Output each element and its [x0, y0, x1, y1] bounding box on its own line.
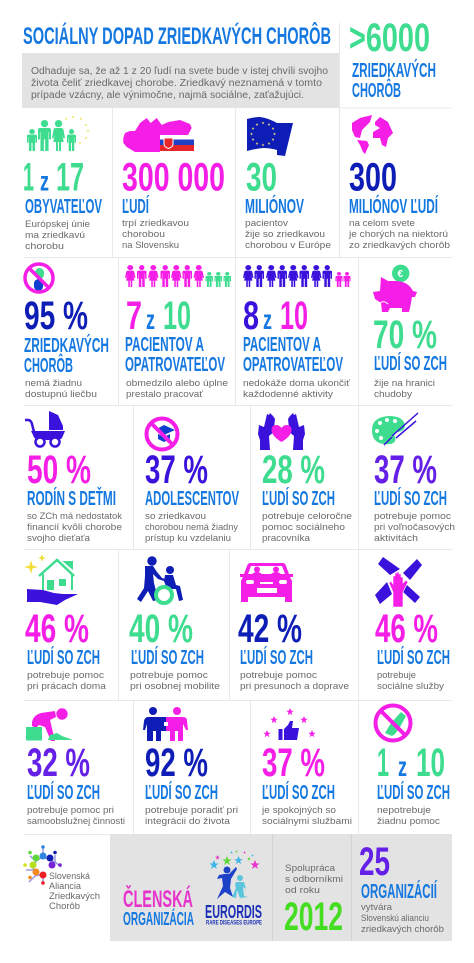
panel: 37 % adolescents: ADOLESCENTOV	[145, 488, 239, 510]
panel: 1 z 17: ma zriedkavú	[25, 230, 85, 241]
panel: 28 %: pomoc sociálneho	[262, 522, 345, 533]
panel: 37 % satisfied: je spokojných so	[261, 805, 336, 816]
panel: 7 z 10: 10	[163, 294, 191, 338]
panel: 46 % social services: potrebuje	[377, 670, 416, 681]
panel: 8 z 10: OPATROVATEĽOV	[243, 354, 343, 376]
panel: 42 % transport: potrebuje pomoc	[240, 670, 317, 681]
panel: 7 z 10	[125, 265, 231, 400]
icon: person bending to tie shoes	[26, 708, 73, 741]
member organisation heading: ORGANIZÁCIA	[123, 908, 194, 929]
icon: globe	[352, 115, 393, 154]
panel: 92 % integration: integrácii do života	[145, 816, 231, 827]
panel: 7 z 10: PACIENTOV A	[125, 334, 204, 356]
panel: 40 % mobility	[129, 556, 220, 692]
panel: 37 % leisure: pri voľnočasových	[374, 522, 455, 533]
panel: 7 z 10: obmedzilo alebo úplne	[126, 378, 228, 389]
stat: 25 organisations: 25	[359, 840, 390, 884]
panel: 37 % leisure: aktivitách	[374, 533, 418, 544]
panel: 95 %: nemá žiadnu	[25, 378, 82, 389]
panel: 30 million: MILIÓNOV	[245, 194, 304, 218]
stat: cooperation since 2012: Spolupráca	[285, 863, 336, 874]
panel: 40 % mobility: potrebuje pomoc	[130, 670, 208, 681]
panel: 95 %: 95 %	[24, 294, 88, 338]
icon: two people joined by puzzle piece	[143, 707, 188, 741]
panel: 1 z 17: chorobu	[25, 241, 64, 252]
panel: 70 %: 70 %	[373, 313, 437, 357]
panel: 40 % mobility: 40 %	[129, 607, 193, 651]
icon: eight violet and two magenta people	[243, 265, 350, 287]
panel: 50 %: financií kvôli chorobe	[27, 522, 122, 533]
stat: cooperation since 2012: od roku	[285, 885, 320, 896]
panel: 1 z 17: OBYVATEĽOV	[25, 196, 102, 218]
icon: Slovakia map and flag	[123, 118, 194, 152]
panel: intro text: života čeliť zriedkavej chorobe. Zriedkavý neznamená v tomto	[31, 78, 322, 89]
panel: 28 %	[258, 413, 352, 544]
panel: footer	[110, 834, 452, 941]
icon: helper pushing wheelchair	[137, 556, 183, 603]
panel: 28 %: ĽUDÍ SO ZCH	[262, 487, 335, 510]
icon: no medicine	[25, 264, 53, 292]
panel: intro text: Odhaduje sa, že až 1 z 20 ľudí na svete bude v istej chvíli svojho	[31, 66, 328, 77]
stat: 25 organisations	[359, 840, 444, 935]
panel: 46 % social services: 46 %	[375, 607, 438, 651]
panel: 37 % satisfied	[261, 708, 352, 827]
panel: 32 % self-care: ĽUDÍ SO ZCH	[27, 781, 100, 804]
panel: 300 000: ĽUDÍ	[122, 195, 149, 218]
panel: 300 000: chorobou	[122, 229, 165, 240]
panel: 8 z 10: PACIENTOV A	[243, 334, 321, 356]
panel: 50 %: RODÍN S DEŤMI	[27, 486, 116, 510]
panel: 30 million: pacientov	[245, 218, 288, 229]
panel: intro text	[22, 53, 339, 108]
icon: palette and brushes	[372, 413, 418, 445]
panel: 95 %: dostupnú liečbu	[25, 389, 97, 400]
panel: 46 % home: pri prácach doma	[27, 681, 107, 692]
panel: 42 % transport	[238, 563, 349, 692]
icon: thumbs up with stars	[263, 708, 316, 740]
icon: piggy bank with coin: €	[398, 269, 404, 280]
panel: 1 z 10	[376, 706, 450, 827]
panel: 32 % self-care	[26, 708, 125, 827]
panel: 8 z 10	[243, 265, 350, 400]
panel: 32 % self-care: samoobslužnej činnosti	[27, 816, 125, 827]
panel: 37 % satisfied: sociálnymi službami	[262, 816, 352, 827]
panel: 8 z 10: 8	[243, 294, 259, 338]
panel: 300 000	[122, 118, 225, 251]
panel: 95 %: ZRIEDKAVÝCH	[24, 333, 109, 357]
panel: 70 %: chudoby	[374, 389, 412, 400]
panel: 1 z 10: 1	[377, 741, 389, 785]
panel: 40 % mobility: pri osobnej mobilite	[130, 681, 220, 692]
panel: 46 % home: potrebuje pomoc	[27, 670, 104, 681]
panel: 28 %: potrebuje celoročne	[262, 511, 352, 522]
panel: 50 %: 50 %	[27, 448, 91, 492]
panel: 30 million: chorobou v Európe	[245, 240, 331, 251]
logo: Slovenská Aliancia Zriedkavých Chorôb	[23, 845, 100, 912]
panel: 300 million people: 300	[349, 156, 397, 200]
panel: 92 % integration: 92 %	[145, 741, 208, 785]
logo: Slovenská Aliancia Zriedkavých Chorôb: Aliancia	[49, 881, 82, 892]
stat: cooperation since 2012	[284, 863, 343, 939]
panel: 42 % transport: ĽUDÍ SO ZCH	[240, 646, 313, 669]
panel: 8 z 10: každodenné aktivity	[243, 389, 333, 400]
panel: 37 % leisure: potrebuje pomoc	[374, 511, 451, 522]
panel: 30 million: 30	[246, 156, 277, 200]
logo: EURORDIS: RARE DISEASES EUROPE	[206, 920, 262, 926]
stat: more than 6000 rare diseases	[349, 16, 436, 102]
panel: 1 z 17: 1	[23, 156, 34, 200]
stat: 25 organisations: vytvára	[361, 902, 393, 913]
panel: 37 % adolescents: so zriedkavou	[145, 511, 206, 522]
panel: 37 % satisfied: ĽUDÍ SO ZCH	[262, 781, 335, 804]
logo: EURORDIS	[205, 850, 262, 926]
panel: 28 %: 28 %	[262, 448, 325, 492]
logo: EURORDIS: EURORDIS	[205, 902, 262, 922]
stat: 25 organisations: zriedkavých chorôb	[361, 924, 444, 935]
panel: 50 %: so ZCh má nedostatok	[27, 511, 122, 522]
icon: no help hand	[376, 706, 410, 740]
panel: 7 z 10: prestalo pracovať	[126, 389, 203, 400]
panel: 32 % self-care: 32 %	[27, 741, 90, 785]
panel: 300 million people	[348, 115, 450, 251]
panel: 92 % integration	[143, 707, 238, 827]
logo: Slovenská Aliancia Zriedkavých Chorôb: Chorôb	[49, 901, 80, 912]
stat: cooperation since 2012: s odborníkmi	[285, 874, 343, 885]
panel: 40 % mobility: ĽUDÍ SO ZCH	[131, 646, 204, 669]
stat: more than 6000 rare diseases: CHORÔB	[352, 78, 401, 102]
panel: 46 % social services: sociálne služby	[377, 681, 444, 692]
panel: 50 %	[25, 411, 122, 544]
icon: house on a hand with sparkles	[24, 554, 78, 605]
panel: 32 % self-care: potrebuje pomoc pri	[27, 805, 114, 816]
panel: 95 %	[24, 264, 109, 400]
icon: EU flag	[247, 117, 293, 156]
panel: 8 z 10: nedokáže doma ukončiť	[243, 378, 350, 389]
stat: 25 organisations: Slovenskú alianciu	[361, 913, 429, 924]
panel: 92 % integration: ĽUDÍ SO ZCH	[145, 781, 218, 804]
panel: 7 z 10: z	[146, 304, 155, 335]
icon: hands holding heart	[258, 413, 305, 450]
panel: 37 % leisure	[372, 413, 455, 544]
panel: 1 z 17	[23, 116, 102, 252]
panel: 46 % home: ĽUDÍ SO ZCH	[27, 646, 100, 669]
panel: 42 % transport: 42 %	[238, 607, 302, 651]
icon: seven magenta and three green people	[125, 265, 231, 287]
panel: 42 % transport: pri presunoch a doprave	[240, 681, 349, 692]
logo: Slovenská Aliancia Zriedkavých Chorôb: Zriedkavých	[49, 891, 100, 902]
panel: 50 %: svojho dieťaťa	[27, 533, 91, 544]
panel: 30 million: žije so zriedkavou	[245, 229, 325, 240]
panel: 1 z 10: z	[398, 751, 407, 782]
member organisation heading: ČLENSKÁ	[123, 885, 193, 913]
panel: 70 %	[373, 265, 447, 400]
panel: 1 z 10: nepotrebuje	[377, 805, 431, 816]
stat: cooperation since 2012: 2012	[284, 895, 343, 939]
panel: 46 % home	[24, 554, 107, 692]
panel: 37 % adolescents: 37 %	[145, 448, 208, 492]
panel: 1 z 17: 17	[56, 156, 84, 200]
panel: 30 million	[245, 117, 331, 251]
icon: stroller	[25, 411, 65, 446]
panel: 300 million people: zo zriedkavých chorôb	[349, 240, 450, 251]
panel: 28 %: pracovníka	[262, 533, 311, 544]
panel: 37 % adolescents: chorobou nemá žiadny	[145, 522, 238, 533]
panel: 70 %: žije na hranici	[374, 378, 435, 389]
panel: 37 % adolescents	[145, 418, 239, 544]
panel: 7 z 10: OPATROVATEĽOV	[125, 354, 225, 376]
panel: 46 % home: 46 %	[25, 607, 89, 651]
panel: 300 000: na Slovensku	[122, 240, 179, 251]
panel: 37 % adolescents: prístup ku vzdelaniu	[145, 533, 231, 544]
panel: intro text: prípade vzácny, ale výnimočne, najmä sociálne, zaťažujúci.	[31, 90, 304, 101]
icon: car front	[240, 563, 293, 602]
panel: 8 z 10: z	[263, 304, 272, 335]
panel: 1 z 17: z	[40, 166, 49, 196]
panel: 37 % leisure: 37 %	[374, 448, 437, 492]
member organisation heading	[123, 885, 194, 929]
panel: 37 % satisfied: 37 %	[262, 741, 325, 785]
icon: stacked hands	[375, 557, 422, 607]
panel: 300 million people: je chorých na niektorú	[348, 229, 448, 240]
panel: 1 z 17: Európskej únie	[25, 219, 90, 230]
logo: Slovenská Aliancia Zriedkavých Chorôb: Slovenská	[49, 871, 91, 882]
icon: no education	[146, 418, 178, 450]
panel: 300 million people: na celom svete	[349, 218, 415, 229]
panel: 300 000: trpí zriedkavou	[122, 218, 189, 229]
panel: 1 z 10: 10	[416, 741, 445, 785]
panel: 92 % integration: potrebuje poradiť pri	[145, 805, 238, 816]
panel: 95 %: CHORÔB	[24, 353, 73, 377]
panel: 46 % social services	[375, 557, 450, 692]
panel: 1 z 10: žiadnu pomoc	[377, 816, 440, 827]
panel: 7 z 10: 7	[126, 294, 142, 338]
panel: 8 z 10: 10	[280, 294, 308, 338]
panel: 300 000: 300 000	[122, 156, 225, 200]
icon: family with EU stars	[27, 116, 89, 151]
stat: more than 6000 rare diseases: >6000	[349, 16, 430, 60]
